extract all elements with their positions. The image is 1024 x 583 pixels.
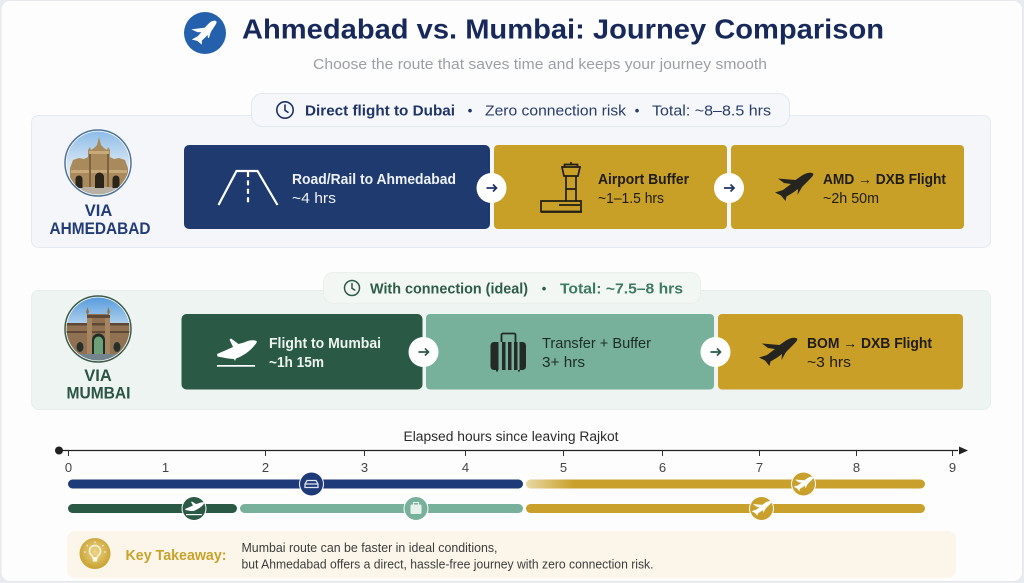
marker: flight segment xyxy=(791,472,816,496)
route label: via Ahmedabad: VIA xyxy=(85,202,112,220)
medallion: Ahmedabad monument xyxy=(64,129,132,197)
axis tick labels: 0 xyxy=(65,460,72,475)
step: BOM to DXB flight: BOM → DXB Flight xyxy=(807,336,932,352)
icon: road xyxy=(218,171,278,205)
axis tick labels: 2 xyxy=(262,460,269,475)
step: flight to Mumbai: ~1h 15m xyxy=(269,355,324,371)
axis title: Elapsed hours since leaving Rajkot xyxy=(404,429,619,444)
axis tick labels: 1 xyxy=(162,460,169,475)
axis xyxy=(55,446,968,456)
title: Ahmedabad vs. Mumbai: Journey Comparison xyxy=(242,14,884,44)
route label: via Mumbai: VIA xyxy=(84,367,112,385)
step: BOM to DXB flight xyxy=(718,314,963,390)
step: BOM to DXB flight: ~3 hrs xyxy=(807,355,851,371)
step: transfer and buffer xyxy=(426,314,714,390)
axis tick labels: 7 xyxy=(756,460,763,475)
step: road or rail to Ahmedabad: Road/Rail to Ahmedabad xyxy=(292,172,456,188)
arrow: transfer to flight xyxy=(700,337,730,367)
timeline row: via Mumbai xyxy=(68,496,925,521)
icon: light bulb xyxy=(80,538,110,569)
icon: airplane badge xyxy=(184,12,226,54)
step: road or rail to Ahmedabad: ~4 hrs xyxy=(292,191,336,207)
step: AMD to DXB flight xyxy=(731,145,964,229)
summary pill: Ahmedabad: • xyxy=(635,103,640,118)
callout: key takeaway xyxy=(67,531,956,578)
medallion: Gateway of India xyxy=(64,295,132,363)
subtitle: Choose the route that saves time and keeps your journey smooth xyxy=(313,56,767,73)
arrow: airport to flight xyxy=(714,173,744,203)
panel: via Mumbai xyxy=(32,272,990,410)
marker: flight to Dubai xyxy=(749,496,774,521)
takeaway text: Mumbai route can be faster in ideal conditions, xyxy=(242,540,498,555)
icon: suitcase xyxy=(490,334,526,372)
timeline chart xyxy=(55,429,968,521)
header xyxy=(184,12,884,73)
icon: clock xyxy=(344,280,360,296)
summary pill: Mumbai: With connection (ideal) xyxy=(370,282,528,298)
summary pill: Ahmedabad: • xyxy=(468,103,473,118)
icon: control tower xyxy=(541,162,582,212)
summary pill: Ahmedabad: Zero connection risk xyxy=(485,104,627,120)
step: AMD to DXB flight: ~2h 50m xyxy=(823,191,879,207)
takeaway text: but Ahmedabad offers a direct, hassle-free journey with zero connection risk. xyxy=(242,556,654,572)
timeline row: via Ahmedabad xyxy=(68,472,925,496)
step: airport buffer xyxy=(494,145,727,229)
marker: transfer xyxy=(404,496,428,521)
icon: airplane xyxy=(775,173,813,201)
summary pill: Mumbai: Total: ~7.5–8 hrs xyxy=(560,282,683,298)
step: airport buffer: ~1–1.5 hrs xyxy=(598,191,664,207)
axis tick labels: 6 xyxy=(659,460,666,475)
icon: airplane xyxy=(759,338,797,366)
step: transfer and buffer: Transfer + Buffer xyxy=(542,336,651,352)
route label: via Ahmedabad: AHMEDABAD xyxy=(50,220,151,238)
axis tick labels: 5 xyxy=(560,460,567,475)
summary pill: Mumbai: • xyxy=(542,281,547,296)
step: road or rail to Ahmedabad xyxy=(184,145,490,229)
summary pill: Ahmedabad: Total: ~8–8.5 hrs xyxy=(652,104,771,120)
icon: takeoff xyxy=(217,338,257,367)
step: airport buffer: Airport Buffer xyxy=(598,172,689,188)
step: AMD to DXB flight: AMD → DXB Flight xyxy=(823,172,946,188)
arrow: road to airport xyxy=(476,173,506,203)
summary pill: Ahmedabad: Direct flight to Dubai xyxy=(305,104,455,120)
axis tick labels xyxy=(65,460,956,475)
route label: via Mumbai: MUMBAI xyxy=(66,384,130,402)
step: transfer and buffer: 3+ hrs xyxy=(542,355,585,371)
summary pill: Ahmedabad xyxy=(252,94,790,126)
panel: via Ahmedabad xyxy=(32,94,990,248)
marker: road segment xyxy=(299,472,324,496)
axis tick labels: 8 xyxy=(853,460,860,475)
summary pill: Mumbai xyxy=(324,272,700,304)
step: flight to Mumbai: Flight to Mumbai xyxy=(269,336,381,352)
arrow: flight to transfer xyxy=(408,337,438,367)
step: flight to Mumbai xyxy=(182,314,422,390)
axis tick labels: 3 xyxy=(361,460,368,475)
marker: flight to Mumbai xyxy=(182,496,206,521)
axis tick labels: 9 xyxy=(949,460,956,475)
icon: clock xyxy=(277,102,293,118)
takeaway label: Key Takeaway: xyxy=(126,547,226,564)
axis tick labels: 4 xyxy=(462,460,469,475)
